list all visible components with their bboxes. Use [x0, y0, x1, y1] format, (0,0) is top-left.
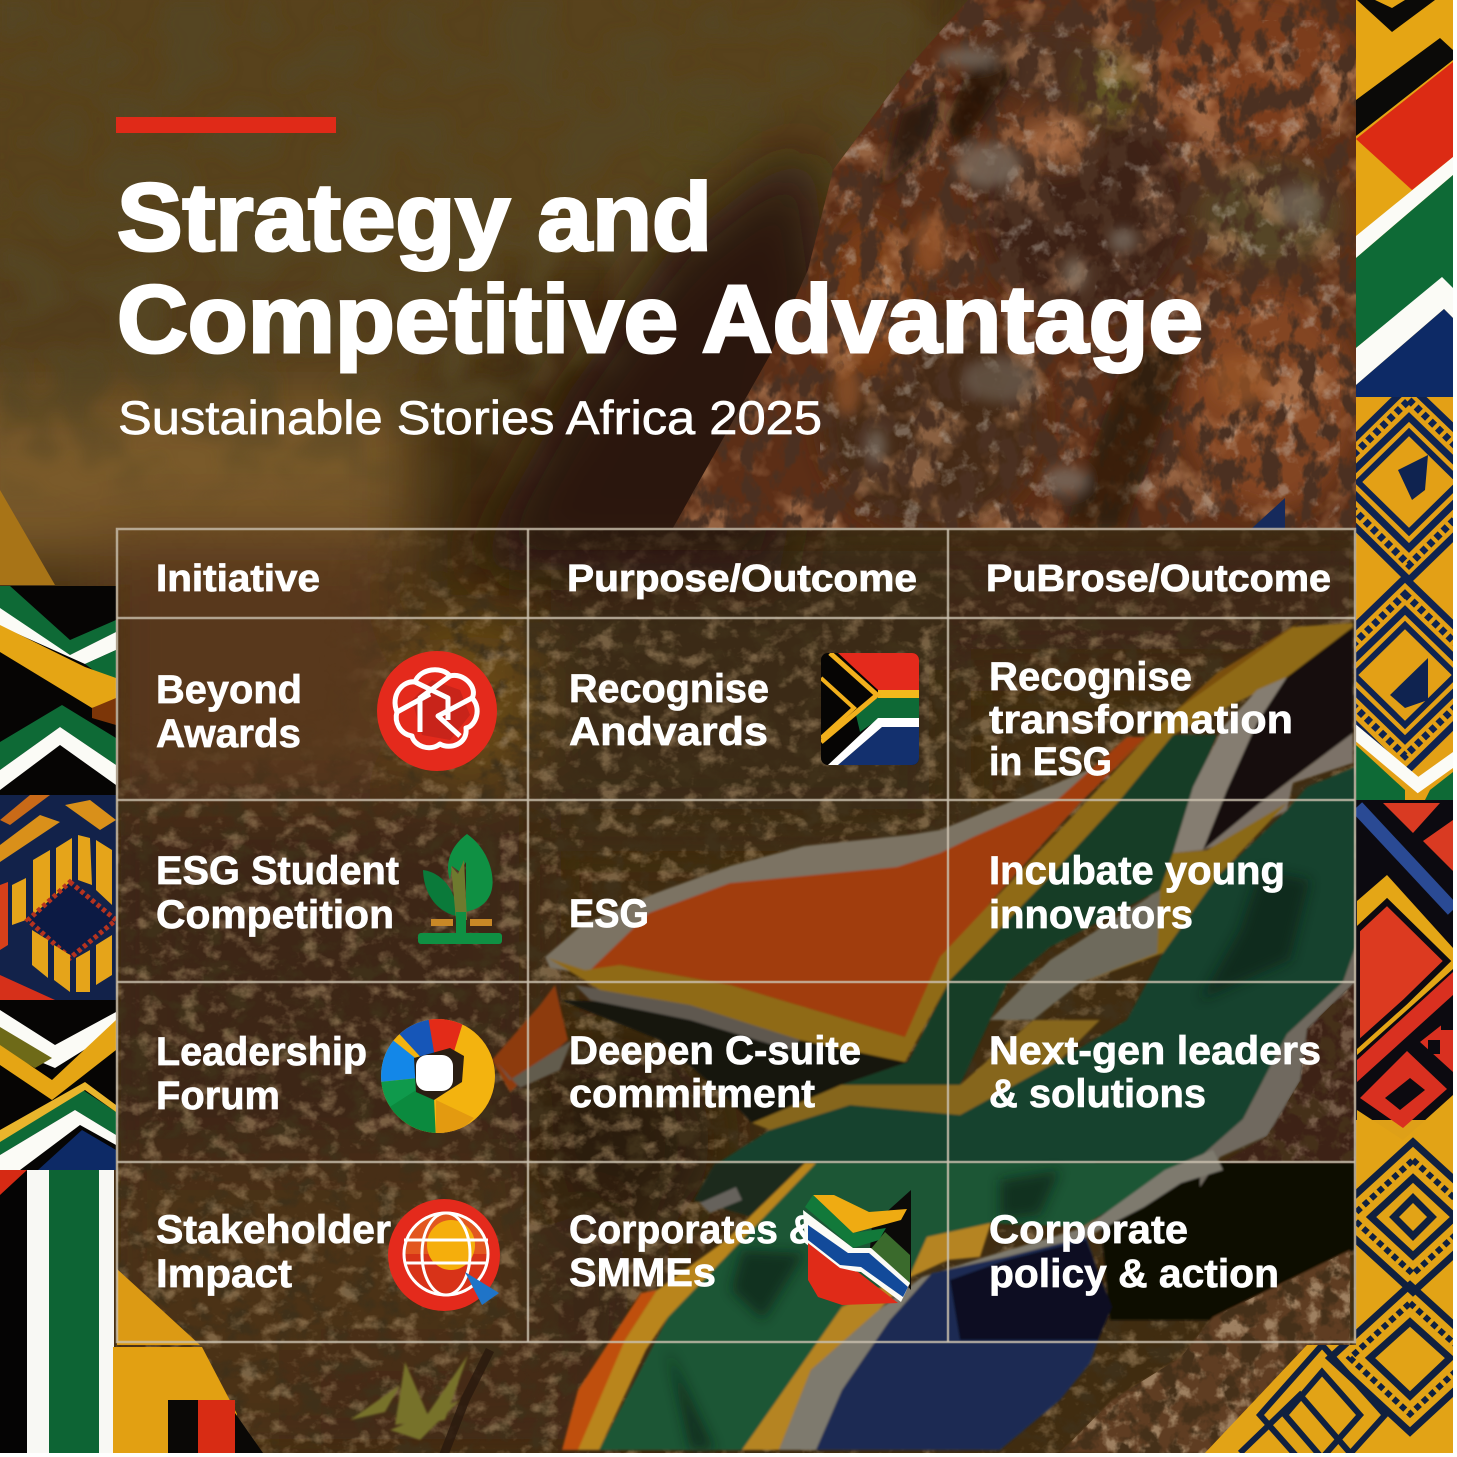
plant in foreground [350, 1355, 468, 1440]
flag grey fringe middle [990, 890, 1160, 1020]
flag fold shadows [668, 870, 1310, 1450]
left border: lower chevrons [0, 1000, 116, 1170]
dead branch [443, 1350, 490, 1457]
orange lattice stripes [0, 815, 60, 862]
vegetation textures [116, 530, 1356, 1453]
row 4: Stakeholder Impact: policy & action [989, 1252, 1279, 1296]
brown rock texture beyond fringe [1220, 980, 1360, 1165]
checker block [1420, 1016, 1453, 1072]
red diagonal band [1357, 972, 1453, 1082]
row 1: Beyond Awards: Andvards [569, 710, 768, 754]
green corner left [1356, 745, 1405, 800]
table header row: Purpose/Outcome [567, 558, 917, 600]
icon: green plant [418, 834, 502, 944]
right border: flag chevrons [1356, 0, 1453, 397]
title: Competitive Advantage [117, 266, 1203, 373]
South African flag draped in photo [492, 620, 1355, 1453]
rock dark pits [660, 0, 1360, 530]
white chevron lower [1350, 728, 1457, 785]
flag white stripe right [1203, 733, 1353, 850]
flag navy dark upper [950, 1240, 1112, 1340]
black band [1356, 38, 1453, 136]
navy base [1356, 309, 1453, 397]
flag green small panel [950, 735, 1217, 983]
green corner right [1425, 772, 1453, 800]
row 1: Beyond Awards: Recognise [569, 667, 769, 711]
right border: diamond pattern panel [1305, 385, 1457, 800]
flag yellow stripe left lower [578, 1163, 816, 1450]
icon: globe with cursor [388, 1199, 500, 1311]
lower red stripe [0, 975, 55, 1000]
row 4: Stakeholder Impact: Impact [156, 1252, 292, 1296]
flag orange panel [585, 737, 1147, 1037]
row 4: Stakeholder Impact: SMMEs [569, 1251, 716, 1295]
flag dark band [560, 1000, 908, 1123]
dark blurred rock behind main rock [470, 140, 830, 570]
flag grey stripe lower [779, 1150, 1223, 1450]
flag dark top-left corner [694, 1163, 816, 1217]
flag navy panel [816, 1237, 1110, 1450]
red diamond block [1357, 902, 1447, 1045]
row 2: ESG Student Competition: Incubate young [989, 849, 1285, 893]
row 3: Leadership Forum: & solutions [989, 1072, 1206, 1116]
icon: white rounded square in aperture [416, 1055, 453, 1091]
row 1: Beyond Awards: transformation [989, 698, 1293, 742]
title: Strategy and [117, 164, 712, 271]
flag brown rock bottom [1060, 1250, 1350, 1453]
row 2: ESG Student Competition: ESG [569, 892, 649, 936]
icon: multicolour aperture circle [375, 1015, 500, 1140]
flag green main panel [715, 767, 1355, 1165]
row 3: Leadership Forum: commitment [569, 1072, 815, 1116]
row 1: Beyond Awards: Beyond [156, 668, 302, 712]
rock crevices and highlights [833, 47, 1322, 528]
yellow cells lower [32, 930, 48, 978]
yellow diamond band [1357, 875, 1453, 1055]
row 1: Beyond Awards: in ESG [989, 740, 1112, 784]
rock grey lichen [820, 20, 1340, 530]
title accent bar [116, 117, 336, 133]
flag yellow stripe along orange [548, 623, 1353, 1062]
subtitle: Sustainable Stories Africa 2025 [118, 391, 822, 444]
left border: upper chevrons [0, 586, 116, 795]
flag grey strip on dark band [575, 985, 800, 1050]
row 4: Stakeholder Impact: Corporates & [569, 1208, 817, 1252]
flag brown rock beyond fringe [1223, 982, 1355, 1162]
cursor arrow [465, 1272, 499, 1305]
left border: geometric woven panel [0, 795, 116, 1000]
row 3: Leadership Forum: Forum [156, 1074, 280, 1118]
row 3: Leadership Forum: Deepen C-suite [569, 1029, 861, 1073]
flag orange stripe lower [562, 1290, 657, 1450]
black base of red section [1356, 800, 1453, 1120]
icon: South African flag tile [821, 653, 919, 765]
checker dark squares [1428, 1016, 1453, 1054]
white band [1356, 157, 1453, 258]
row 2: ESG Student Competition: innovators [989, 893, 1193, 937]
diamond centre glyph lower [1390, 658, 1428, 708]
row 2: ESG Student Competition: ESG Student [156, 849, 399, 893]
bottom-left yellow blocks [113, 1269, 263, 1453]
flag black stripe [1203, 627, 1353, 850]
table header row: Initiative [156, 558, 320, 600]
left red edge [0, 882, 8, 950]
flag yellow stripe lower [752, 1020, 1100, 1130]
lower red diamond [1360, 1051, 1447, 1128]
flag grey under fold [496, 1040, 572, 1088]
rock orange mottling [660, 0, 1360, 530]
row 1: Beyond Awards: Awards [156, 712, 301, 756]
flag lower green panel [599, 1163, 1181, 1450]
black top chevron [1357, 0, 1435, 32]
green band [1356, 175, 1453, 348]
yellow maze field [1205, 1095, 1453, 1453]
flag fringe top [545, 765, 1110, 975]
flag yellow stripe middle [1080, 803, 1287, 983]
red block right [1423, 820, 1453, 871]
flag grey fringe right [1200, 948, 1355, 1187]
diamond centre glyph upper [1398, 455, 1428, 500]
red block top [1383, 803, 1440, 833]
flag small red fold [492, 985, 568, 1092]
flag black area right [1095, 1162, 1355, 1320]
row 3: Leadership Forum: Next-gen leaders [989, 1029, 1321, 1073]
table header row: PuBrose/Outcome [986, 558, 1331, 600]
row 4: Stakeholder Impact [156, 1208, 1279, 1296]
row 2: ESG Student Competition: Competition [156, 893, 394, 937]
right border: tribal maze panel [1205, 800, 1457, 1457]
icon: flag ribbon tile [803, 1190, 911, 1305]
vegetation dark texture [116, 530, 1356, 1453]
vegetation light texture [116, 530, 1356, 1453]
table header row [156, 558, 1331, 600]
row 3: Leadership Forum: Leadership [156, 1030, 367, 1074]
brown scrub texture, bottom right [1060, 1250, 1360, 1453]
table grid [117, 529, 1355, 1342]
red band [1356, 62, 1453, 190]
row 2: ESG Student Competition [156, 849, 1285, 937]
flag yellow stripe right lower [742, 1223, 991, 1450]
row 1: Beyond Awards [156, 655, 1293, 784]
white chevron [1356, 277, 1453, 385]
row 4: Stakeholder Impact: Stakeholder [156, 1208, 391, 1252]
small blue flag corner under rock [1250, 498, 1285, 530]
yellow cells upper [33, 850, 50, 915]
blurred bokeh shadows in upper left [0, 14, 913, 483]
central navy diamond [28, 882, 116, 958]
left border: vertical stripes [0, 1170, 114, 1453]
row 1: Beyond Awards: Recognise [989, 655, 1192, 699]
flag grey patch [700, 1187, 742, 1213]
blue woven stripe [1357, 807, 1453, 910]
lower red diamond glyph [1385, 1078, 1425, 1110]
row 4: Stakeholder Impact: Corporate [989, 1208, 1188, 1252]
row 3: Leadership Forum [156, 1029, 1321, 1118]
flag lower-left green panel [841, 980, 1007, 1085]
icon: red circle knot [377, 651, 497, 771]
flag white stripe upper [1173, 677, 1287, 853]
left border: yellow triangle [0, 490, 55, 585]
title [117, 164, 1203, 373]
flag orange stripe upper [1100, 620, 1303, 777]
rock face [660, 0, 1360, 530]
